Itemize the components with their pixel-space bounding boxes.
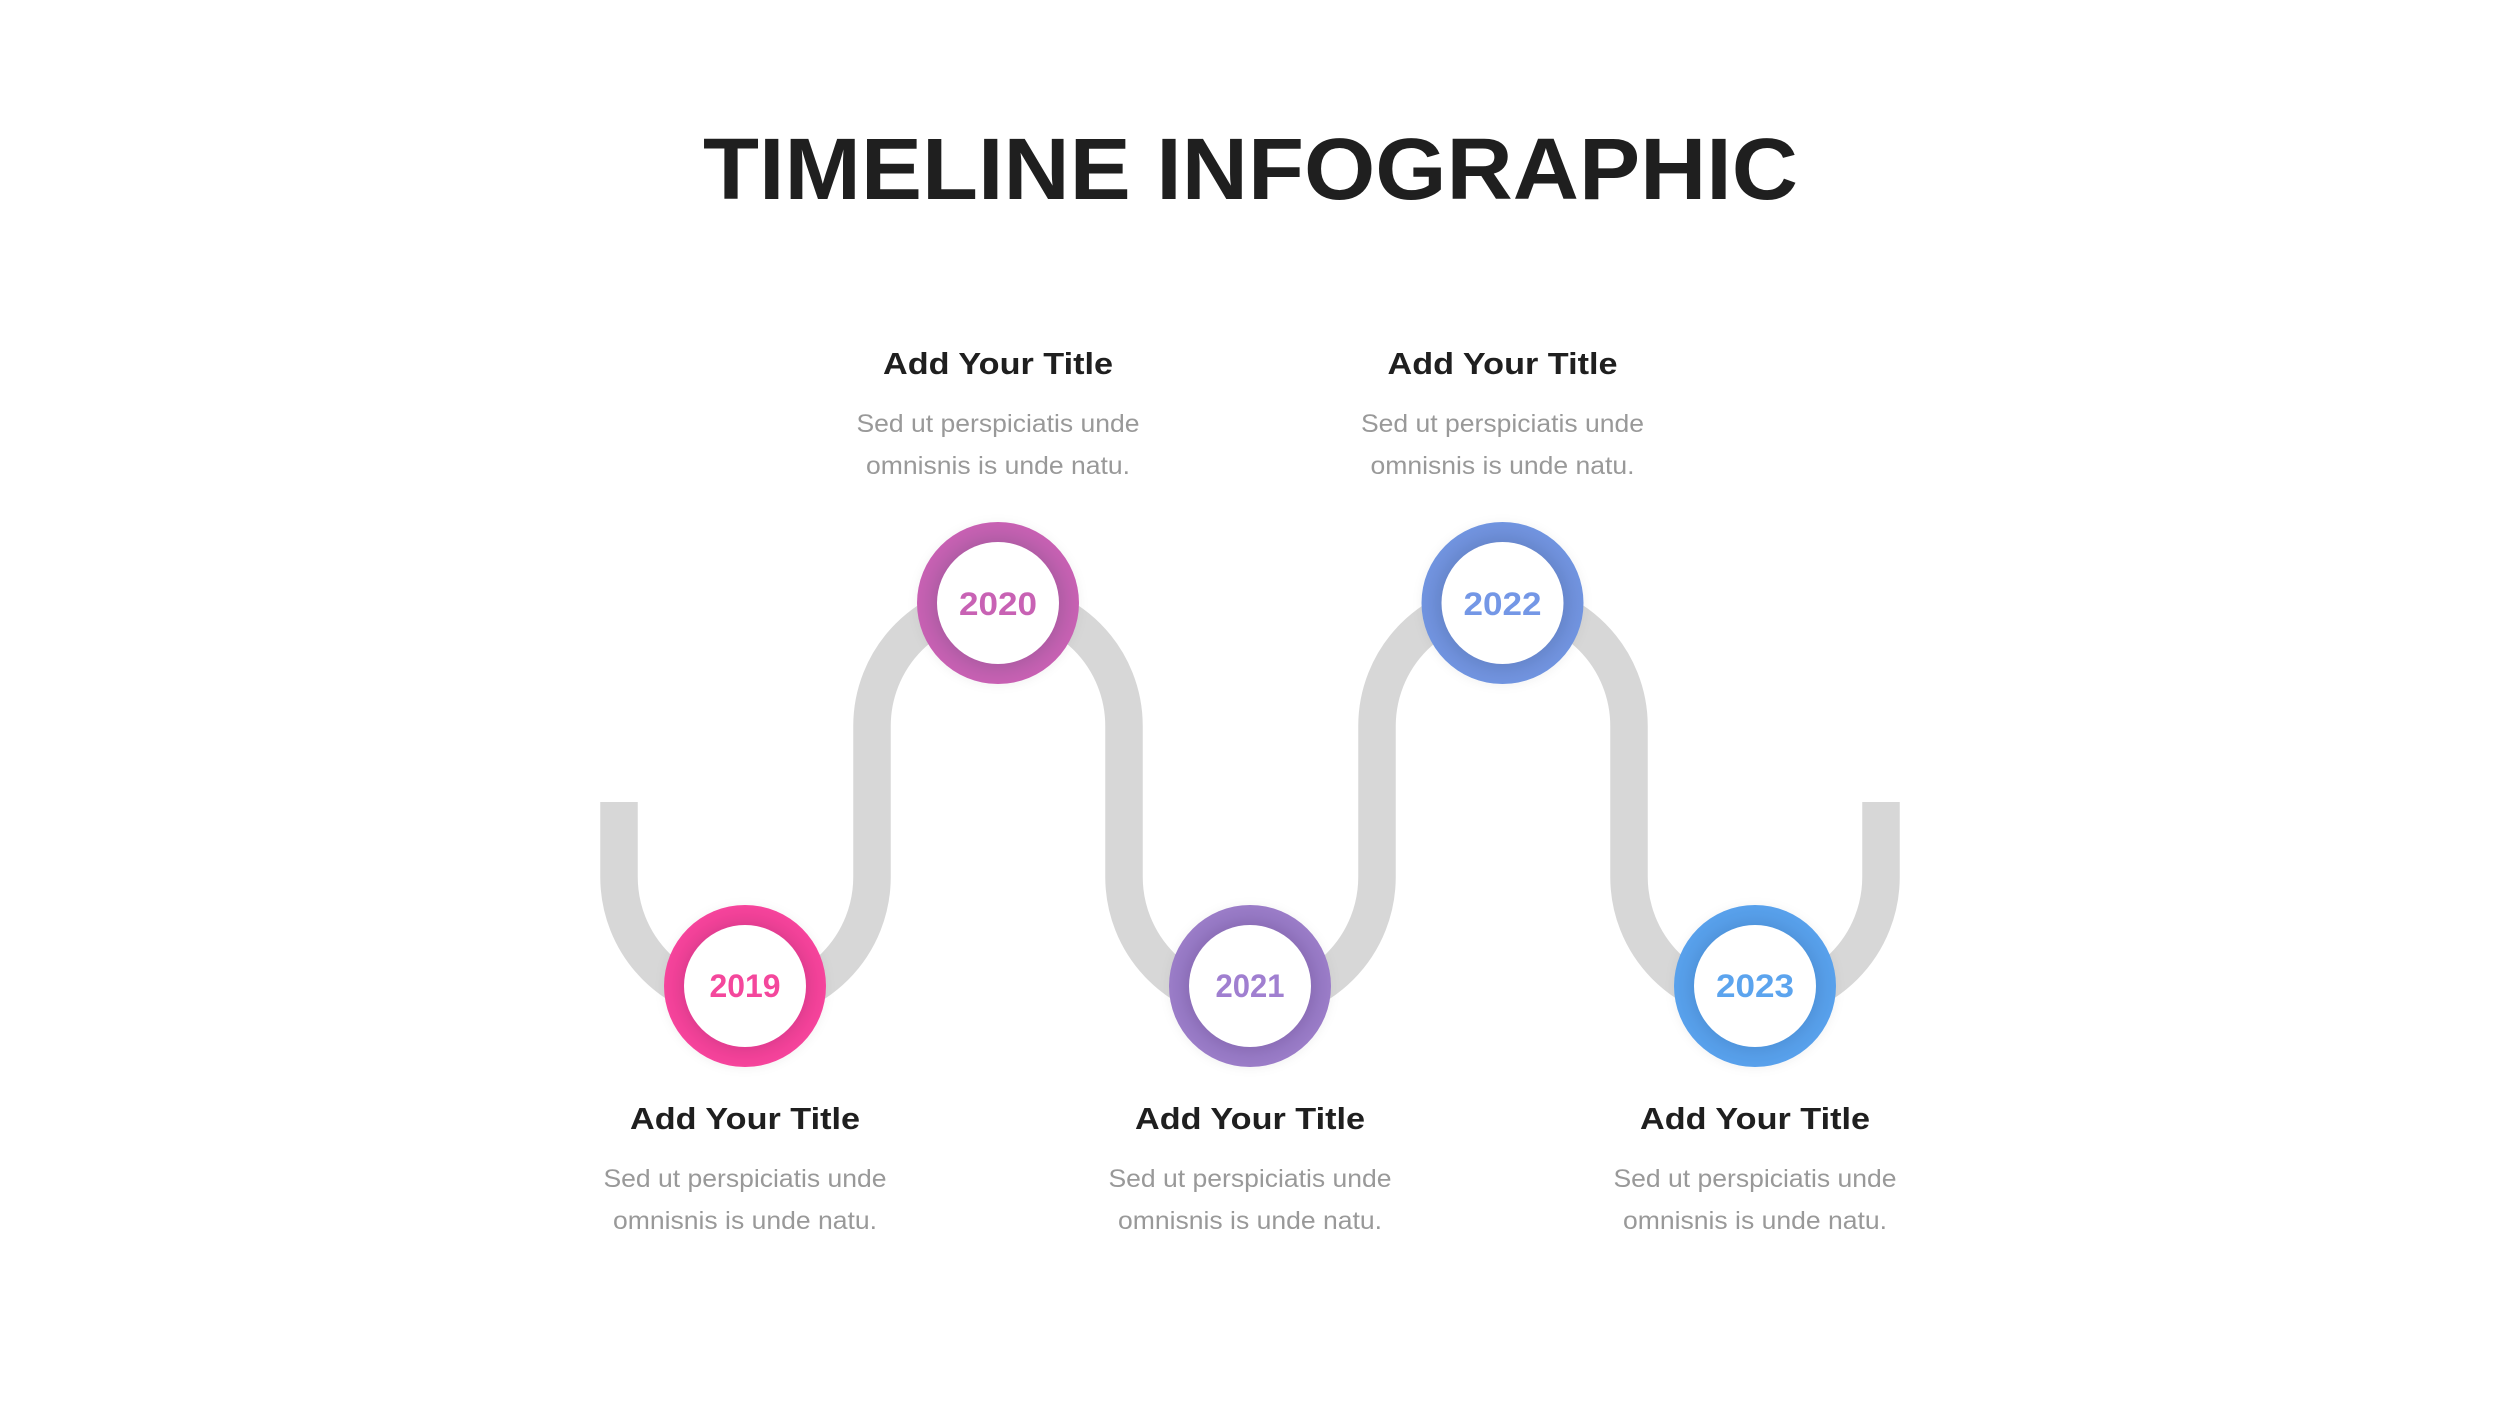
- title: TIMELINE INFOGRAPHIC: [703, 121, 1798, 218]
- description 2023: omnisnis is unde natu.: [1623, 1207, 1887, 1235]
- milestone 2023: [1614, 905, 1896, 1235]
- description 2019: omnisnis is unde natu.: [613, 1207, 877, 1235]
- year 2022: 2022: [1464, 586, 1542, 622]
- description 2021: omnisnis is unde natu.: [1118, 1207, 1382, 1235]
- heading 2020: Add Your Title: [883, 346, 1113, 381]
- year 2023: 2023: [1716, 968, 1794, 1004]
- marker ring 2020: [917, 522, 1079, 684]
- marker ring 2021: [1169, 905, 1331, 1067]
- heading 2019: Add Your Title: [630, 1101, 860, 1136]
- description 2021: Sed ut perspiciatis unde: [1108, 1165, 1392, 1193]
- heading 2021: Add Your Title: [1135, 1101, 1365, 1136]
- year 2021: 2021: [1216, 968, 1284, 1004]
- description 2022: omnisnis is unde natu.: [1370, 452, 1634, 480]
- milestone 2019: [604, 905, 886, 1235]
- milestone 2021: [1108, 905, 1392, 1235]
- winding timeline track: [619, 600, 1881, 1004]
- heading 2023: Add Your Title: [1640, 1101, 1870, 1136]
- marker ring 2023: [1674, 905, 1836, 1067]
- description 2022: Sed ut perspiciatis unde: [1361, 410, 1644, 438]
- milestone 2022: [1361, 346, 1644, 684]
- description 2019: Sed ut perspiciatis unde: [604, 1165, 886, 1193]
- marker ring 2019: [664, 905, 826, 1067]
- year 2020: 2020: [959, 586, 1037, 622]
- description 2020: Sed ut perspiciatis unde: [856, 410, 1140, 438]
- heading 2022: Add Your Title: [1388, 346, 1618, 381]
- milestone 2020: [856, 346, 1140, 684]
- year 2019: 2019: [710, 968, 780, 1004]
- marker ring 2022: [1422, 522, 1584, 684]
- description 2020: omnisnis is unde natu.: [866, 452, 1130, 480]
- description 2023: Sed ut perspiciatis unde: [1614, 1165, 1896, 1193]
